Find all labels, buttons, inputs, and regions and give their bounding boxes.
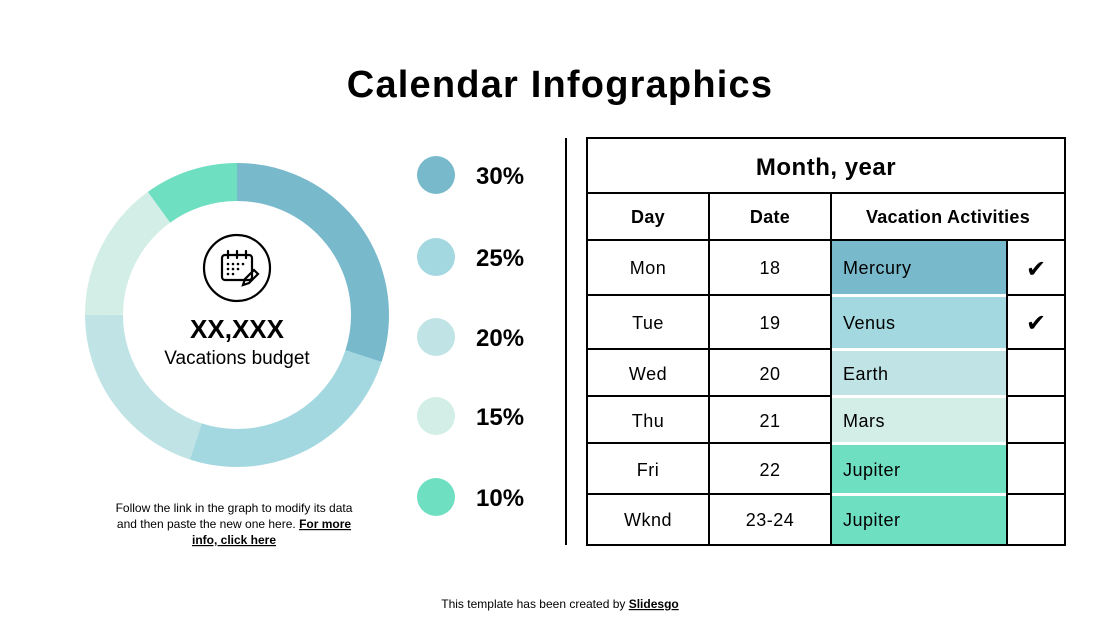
calendar table: Day <box>631 207 665 227</box>
note text: Follow the link in the graph to modify its data <box>116 501 353 515</box>
calendar table: Venus <box>843 313 896 333</box>
calendar table: Earth <box>843 364 889 384</box>
legend: 20% <box>476 325 524 352</box>
calendar table: Fri <box>637 460 659 480</box>
calendar table: 18 <box>759 258 781 278</box>
note text: and then paste the new one here. For more <box>117 517 351 531</box>
budget label: Vacations budget <box>164 348 310 369</box>
calendar table: Wed <box>629 364 667 384</box>
calendar table: 20 <box>759 364 781 384</box>
calendar table <box>587 138 1065 545</box>
icon: calendar <box>204 235 270 301</box>
calendar table: 22 <box>759 460 781 480</box>
calendar table: Wknd <box>624 510 672 530</box>
calendar table: Mars <box>843 411 885 431</box>
legend: 10% <box>476 485 524 512</box>
legend: 30% <box>476 163 524 190</box>
legend: 25% <box>476 245 524 272</box>
title: Calendar Infographics <box>347 64 773 106</box>
calendar table: Mon <box>630 258 666 278</box>
calendar table: Date <box>750 207 790 227</box>
donut chart <box>104 182 370 448</box>
calendar table: Thu <box>632 411 664 431</box>
legend <box>417 156 524 516</box>
note text: info, click here <box>192 533 276 547</box>
calendar table: Vacation Activities <box>866 207 1030 227</box>
calendar table: 21 <box>759 411 781 431</box>
calendar table: Mercury <box>843 258 912 278</box>
note text <box>116 501 353 547</box>
budget value: XX,XXX <box>190 314 285 344</box>
calendar table: Month, year <box>756 154 896 181</box>
calendar table: 19 <box>759 313 781 333</box>
footer: This template has been created by Slidesgo <box>441 597 679 611</box>
legend: 15% <box>476 404 524 431</box>
calendar table: Jupiter <box>843 460 901 480</box>
calendar table: 23-24 <box>746 510 794 530</box>
calendar table: ✔ <box>1026 309 1046 337</box>
calendar table: ✔ <box>1026 255 1046 283</box>
calendar table: Jupiter <box>843 510 901 530</box>
calendar table: Tue <box>632 313 664 333</box>
